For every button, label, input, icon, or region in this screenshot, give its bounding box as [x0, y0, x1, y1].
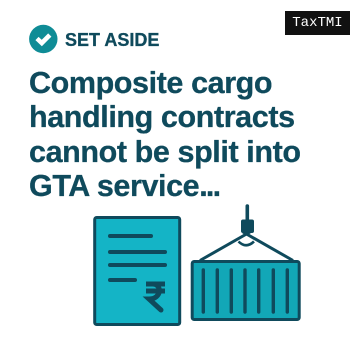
icon: check badge [29, 24, 58, 54]
status label: SET ASIDE [65, 30, 159, 50]
title: Composite cargo [29, 66, 272, 100]
title: GTA service... [29, 168, 219, 202]
watermark: TaxTMI [285, 11, 350, 35]
title: cannot be split into [29, 134, 301, 168]
watermark: TaxTMI: TaxTMI [292, 15, 343, 31]
title [29, 66, 301, 202]
icon: container on crane hook [190, 204, 301, 321]
title: handling contracts [29, 100, 295, 134]
icon: invoice with rupee symbol [93, 216, 182, 326]
